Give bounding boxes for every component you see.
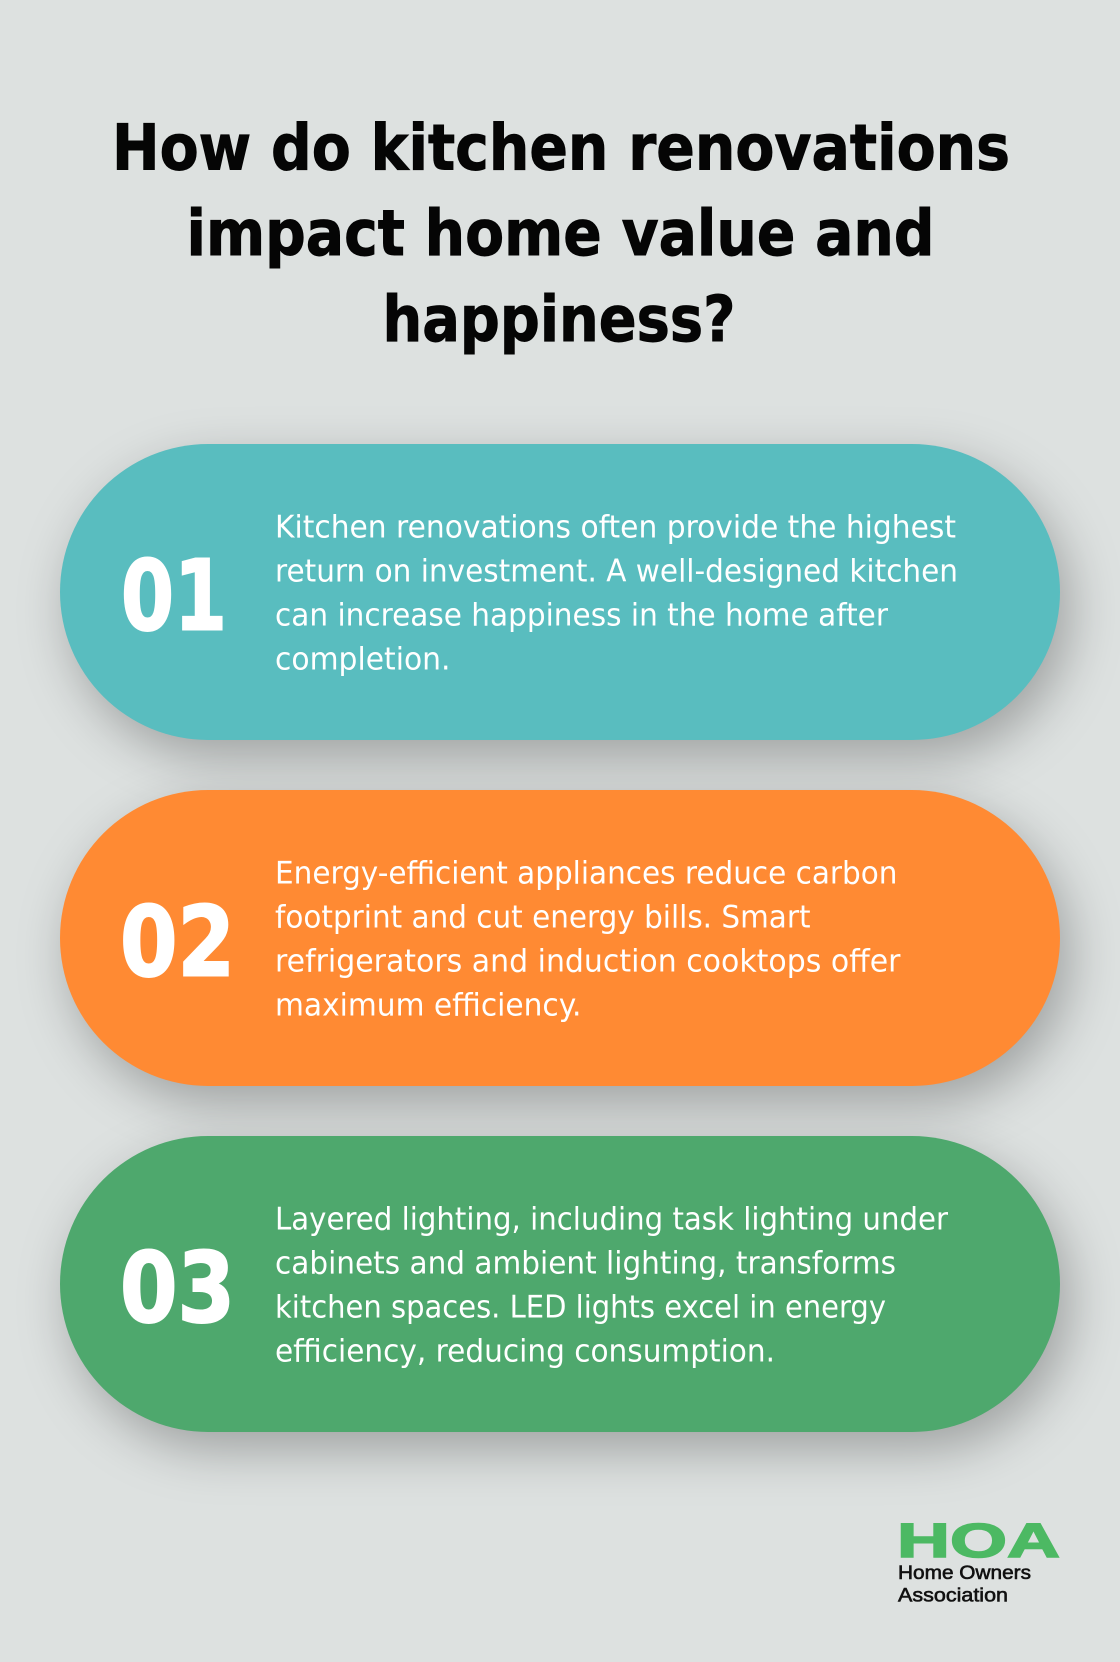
text block: step 01: can increase happiness in the home after <box>275 597 888 633</box>
number 02: 02 <box>120 886 235 998</box>
logo: HOA Home Owners Association: Home Owners <box>898 1562 1031 1584</box>
text block: step 03: cabinets and ambient lighting, transforms <box>275 1245 896 1281</box>
pill background: orange <box>60 790 1060 1086</box>
title: happiness? <box>382 283 736 356</box>
text block: step 03: Layered lighting, including task lighting under <box>275 1201 948 1237</box>
text block: step 01 <box>275 509 958 677</box>
logo: HOA Home Owners Association: Association <box>898 1584 1008 1606</box>
text block: step 01: completion. <box>275 641 450 677</box>
panel: step 02 <box>60 790 1060 1086</box>
title: How do kitchen renovations <box>112 112 1010 184</box>
title: impact home value and <box>186 197 934 270</box>
text block: step 03: kitchen spaces. LED lights excel in energy <box>275 1289 886 1325</box>
pill background: teal <box>60 444 1060 740</box>
text block: step 01: Kitchen renovations often provide the highest <box>275 509 956 545</box>
title <box>112 112 1010 356</box>
text block: step 03 <box>275 1201 948 1369</box>
text block: step 02: footprint and cut energy bills. Smart <box>275 899 810 935</box>
panel: step 03 <box>60 1136 1060 1432</box>
number 01: 01 <box>121 540 227 652</box>
text block: step 02: refrigerators and induction cooktops offer <box>275 943 901 979</box>
logo: HOA Home Owners Association: HOA <box>897 1515 1060 1568</box>
number 03: 03 <box>120 1232 235 1344</box>
text block: step 02: maximum efficiency. <box>275 987 582 1023</box>
text block: step 01: return on investment. A well-designed kitchen <box>275 553 958 589</box>
logo: HOA Home Owners Association <box>897 1515 1060 1606</box>
panel: step 01 <box>60 444 1060 740</box>
pill background: green <box>60 1136 1060 1432</box>
text block: step 02 <box>275 855 901 1023</box>
text block: step 02: Energy-efficient appliances reduce carbon <box>275 855 898 891</box>
text block: step 03: efficiency, reducing consumption. <box>275 1333 775 1369</box>
